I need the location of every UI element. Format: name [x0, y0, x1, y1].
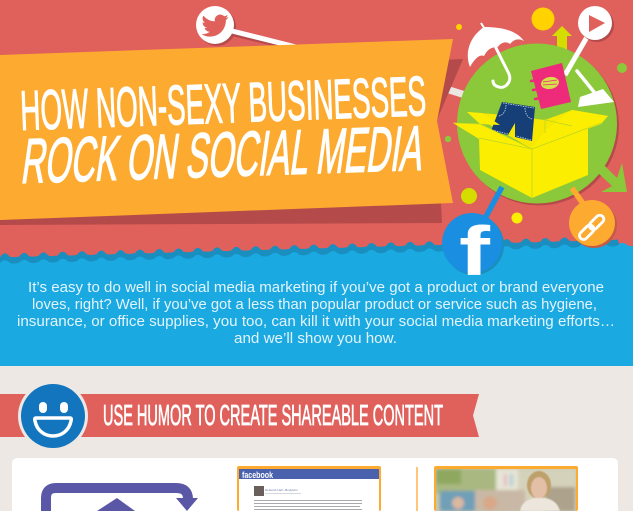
video screenshot	[434, 466, 578, 511]
icon: smiley	[18, 381, 88, 451]
section heading banner	[0, 381, 479, 451]
box back flaps	[467, 110, 608, 149]
icon: link pin	[569, 188, 617, 248]
title banner	[0, 39, 463, 225]
arrow: green lower right	[597, 163, 627, 192]
icon: broom	[577, 71, 614, 107]
circle shadow	[459, 46, 619, 206]
intro text: and we’ll show you how.	[234, 330, 397, 347]
intro text: loves, right? Well, if you’ve got a less than popular product or service such as hygiene,	[32, 296, 597, 313]
yellow box	[453, 110, 608, 198]
arrow: lime up	[552, 26, 572, 50]
icon: umbrella	[468, 23, 524, 87]
green circle	[457, 44, 617, 204]
icon: facebook pin	[442, 187, 504, 290]
banner ribbon	[0, 39, 453, 220]
icon: purple share arrow	[46, 488, 198, 511]
intro text	[17, 279, 615, 347]
icon: play pin	[565, 6, 614, 75]
blue intro panel	[0, 243, 633, 366]
intro text: insurance, or office supplies, you too, can kill it with your social media marketing efforts…	[17, 313, 615, 330]
column divider	[416, 467, 418, 511]
facebook screenshot	[237, 466, 381, 511]
ribbon	[0, 394, 479, 437]
waves: dark blue	[0, 236, 633, 300]
facebook screenshot: facebook	[242, 470, 274, 480]
icon: denim shorts	[491, 102, 535, 141]
decorative dots	[445, 8, 627, 224]
facebook screenshot: Deborah Hall › Bodyform	[265, 488, 299, 492]
connector to banner	[440, 87, 465, 95]
intro text: It’s easy to do well in social media marketing if you’ve got a product or brand everyone	[28, 279, 604, 296]
icon: twitter pin	[196, 6, 300, 50]
content card	[12, 458, 618, 511]
icon: green circle with box and objects	[440, 6, 627, 224]
icon: facebook pin: f	[459, 212, 491, 290]
header panel: red background	[0, 0, 633, 262]
banner shadow	[0, 59, 463, 225]
icon: pink notebook	[531, 63, 571, 109]
